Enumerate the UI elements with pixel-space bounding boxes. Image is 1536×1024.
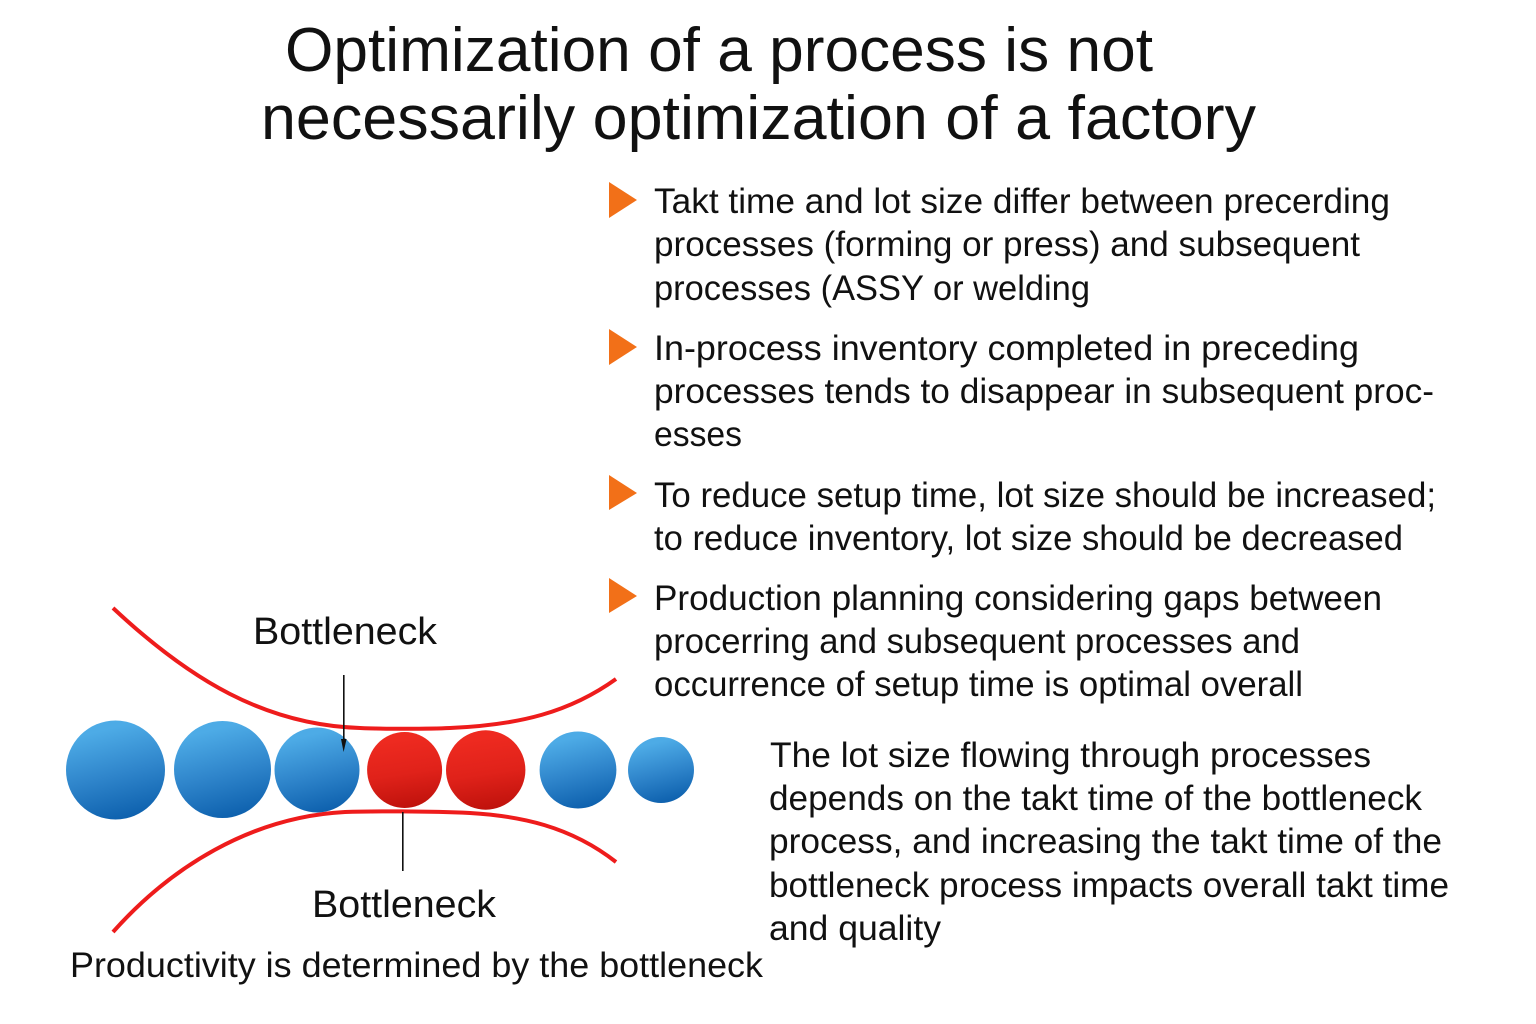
text block: lot size note	[769, 736, 1449, 948]
top pipe curve	[113, 608, 616, 729]
title	[261, 16, 1256, 153]
title: Optimization of a process is not	[285, 16, 1153, 85]
title: necessarily optimization of a factory	[261, 84, 1256, 153]
bullet 3: to reduce inventory, lot size should be decreased	[654, 519, 1403, 558]
bullet 2	[609, 329, 1434, 454]
text block: lot size note: and quality	[769, 909, 942, 948]
caption: Productivity is determined by the bottleneck	[70, 946, 764, 985]
bullet 1: processes (forming or press) and subsequent	[654, 225, 1360, 264]
bullet 2: In-process inventory completed in preceding	[654, 329, 1359, 368]
bullet 4: procerring and subsequent processes and	[654, 622, 1300, 661]
text block: lot size note: process, and increasing the takt time of the	[769, 822, 1442, 861]
text block: lot size note: bottleneck process impacts overall takt time	[769, 866, 1449, 905]
blue circles and red circles	[66, 720, 694, 820]
bullet 2: esses	[654, 415, 742, 454]
label: bottom bottleneck: Bottleneck	[312, 884, 497, 926]
bullet list	[609, 182, 1436, 704]
bullet 4	[609, 578, 1382, 704]
line: bottom bottleneck pointer	[402, 812, 404, 871]
text block: lot size note: The lot size flowing through processes	[770, 736, 1371, 775]
bullet 1: processes (ASSY or welding	[654, 269, 1090, 308]
label: top bottleneck: Bottleneck	[253, 611, 438, 653]
bullet 1: Takt time and lot size differ between precerding	[654, 182, 1390, 221]
text block: lot size note: depends on the takt time of the bottleneck	[769, 779, 1422, 818]
bottleneck diagram	[66, 608, 694, 932]
bullet 1	[609, 182, 1390, 308]
bullet 4: occurrence of setup time is optimal overall	[654, 665, 1303, 704]
bullet 4: Production planning considering gaps between	[654, 579, 1382, 618]
arrow: top bottleneck pointer	[341, 675, 347, 752]
bottom pipe curve	[113, 811, 616, 932]
bullet 3: To reduce setup time, lot size should be increased;	[654, 476, 1436, 515]
bullet 2: processes tends to disappear in subsequent proc-	[654, 372, 1434, 411]
bullet 3	[609, 475, 1436, 558]
